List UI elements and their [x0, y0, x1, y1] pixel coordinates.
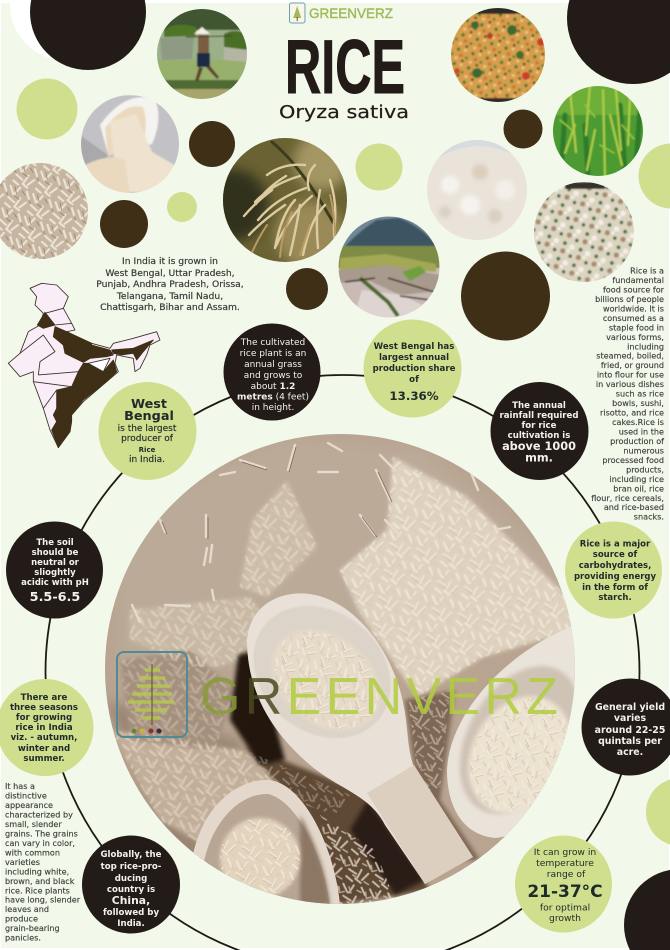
- callout: soil: acidic with pH: [21, 578, 89, 588]
- callout: temperature range: range of: [547, 869, 586, 880]
- text: description of rice uses: products,: [626, 464, 664, 474]
- callout: annual rainfall: [490, 382, 588, 480]
- callout: West Bengal largest producer: [98, 382, 196, 480]
- text: appearance description: brown, and black: [5, 876, 75, 886]
- callout: cultivated rice plant: in height.: [252, 403, 294, 413]
- callout: three seasons: three seasons: [10, 703, 78, 713]
- callout: West Bengal largest producer: Bengal: [124, 409, 174, 424]
- text: description of rice uses: Rice is a: [630, 266, 664, 276]
- callout: three seasons: [0, 679, 94, 776]
- text: description of rice uses: numerous: [623, 445, 664, 455]
- callout: general yield: around 22-25: [595, 725, 665, 736]
- text: description of rice uses: production of: [610, 436, 664, 446]
- callout: West Bengal largest producer: in India.: [129, 455, 165, 465]
- logo: Greenverz: [290, 3, 393, 23]
- callout: temperature range: [515, 836, 612, 932]
- text: appearance description: rice. Rice plants: [5, 885, 70, 895]
- photo: cooked white rice: [425, 140, 529, 246]
- scattered grains: [132, 443, 510, 622]
- text: appearance description: small, slender: [5, 819, 62, 829]
- photo: green rice plants: [550, 85, 646, 177]
- text: appearance description: can vary in color,: [5, 838, 75, 848]
- main photo: wooden spoons with rice: [100, 430, 605, 910]
- callout: source of carbohydrates: starch.: [598, 593, 632, 603]
- callout: general yield: acre.: [617, 747, 643, 758]
- callout: source of carbohydrates: Rice is a major: [580, 540, 651, 550]
- callout: cultivated rice plant: The cultivated: [240, 338, 305, 348]
- text: appearance description: varieties: [5, 857, 40, 867]
- text: description of rice uses: snacks.: [634, 512, 664, 522]
- callout: annual rainfall: rainfall required: [499, 411, 579, 421]
- callout: annual rainfall: The annual: [512, 401, 566, 411]
- callout: cultivated rice plant: [224, 324, 320, 420]
- text: description of rice uses: bran oil, rice: [613, 483, 664, 493]
- callout: soil: should be: [32, 548, 79, 558]
- text: description of rice uses: including: [627, 341, 664, 351]
- decorative circles: top-left white and dark: [10, 0, 146, 70]
- text: where rice is grown in India: Telangana, Tamil Nadu,: [116, 291, 223, 302]
- callout: cultivated rice plant: and grows to: [244, 371, 303, 381]
- small spoon lower left: [192, 780, 340, 905]
- callout: annual rainfall: mm.: [525, 452, 553, 464]
- photo: rice panicle: [223, 138, 347, 262]
- text: appearance description: distinctive: [5, 790, 47, 800]
- callout: general yield: [582, 678, 670, 776]
- callout: West Bengal largest producer: producer of: [121, 434, 174, 444]
- text: description of rice uses: consumed as a: [603, 313, 664, 323]
- text: description of rice uses: worldwide. It is: [603, 303, 664, 313]
- callout: cultivated rice plant: rice plant is an: [240, 349, 306, 359]
- text: description of rice uses: used in the: [619, 426, 664, 436]
- callout: top producing country: Globally, the: [100, 850, 162, 860]
- text: appearance description: produce: [5, 914, 38, 924]
- text: description of rice uses: in various dishes: [596, 379, 664, 389]
- decorative circle: top-right dark: [567, 0, 670, 84]
- dark shadows: [245, 745, 430, 905]
- text: appearance description: grain-bearing: [5, 923, 60, 933]
- callout: general yield: General yield: [595, 702, 665, 713]
- callout: cultivated rice plant: about 1.2: [251, 382, 295, 392]
- text: description of rice uses: risotto, and rice: [600, 408, 664, 418]
- text: description of rice uses: bowls, sushi,: [612, 398, 664, 408]
- text: appearance description: leaves and: [5, 904, 49, 914]
- text: appearance description: have long, slender: [5, 895, 81, 905]
- callout: annual production share: [364, 320, 462, 418]
- subtitle: Oryza sativa: [279, 102, 409, 123]
- text: description of rice uses: steamed, boiled,: [596, 351, 664, 361]
- text: appearance description: with common: [5, 847, 60, 857]
- callout: annual rainfall: cultivation is: [508, 431, 570, 441]
- callout: annual production share: 13.36%: [389, 389, 439, 403]
- callout: cultivated rice plant: metres (4 feet): [237, 392, 309, 402]
- connecting ring: [46, 375, 640, 950]
- photo: farmer carrying rice: [157, 9, 247, 99]
- callout: general yield: varies: [614, 713, 647, 724]
- photo: raw basmati rice: [0, 160, 90, 262]
- callout: top producing country: India.: [117, 919, 145, 929]
- callout: West Bengal largest producer: Rice: [139, 446, 156, 454]
- text: description of rice uses: billions of people: [595, 294, 664, 304]
- text: description of rice uses: processed food: [602, 455, 664, 465]
- text: where rice is grown in India: In India it is grown in: [122, 256, 218, 267]
- callout: source of carbohydrates: [565, 522, 662, 618]
- text: appearance description: grains. The grains: [5, 828, 78, 838]
- callout: source of carbohydrates: in the form of: [582, 583, 648, 593]
- text: where rice is grown in India: West Bengal, Uttar Pradesh,: [105, 268, 235, 279]
- callout: annual production share: of: [409, 375, 419, 385]
- text: description of rice uses: such as rice: [616, 389, 664, 399]
- callout: three seasons: viz. - autumn,: [11, 733, 77, 743]
- callout: source of carbohydrates: carbohydrates,: [579, 561, 651, 571]
- text: appearance description: characterized by: [5, 809, 73, 819]
- text: description of rice uses: into flour for use: [597, 370, 664, 380]
- watermark text: GREENVERZ: [200, 668, 558, 726]
- callout: three seasons: for growing: [16, 713, 72, 723]
- callout: source of carbohydrates: providing energy: [574, 572, 656, 582]
- callout: top producing country: followed by: [103, 908, 159, 918]
- callout: top producing country: China,: [112, 894, 150, 907]
- callout: soil: [6, 522, 103, 618]
- text: description of rice uses: including rice: [610, 474, 664, 484]
- main spoon: [247, 593, 473, 884]
- map: India rice-growing states: [8, 283, 160, 448]
- callout: source of carbohydrates: source of: [593, 550, 638, 560]
- callout: three seasons: winter and: [18, 744, 70, 754]
- callout: temperature range: growth: [549, 913, 581, 924]
- text: description of rice uses: various forms,: [606, 332, 664, 342]
- callout: annual production share: West Bengal has: [374, 342, 454, 352]
- callout: three seasons: rice in India: [15, 723, 73, 733]
- callout: soil: 5.5-6.5: [30, 590, 80, 605]
- callout: top producing country: country is: [107, 885, 155, 895]
- photo: fried rice: [450, 5, 546, 105]
- callout: temperature range: 21-37°C: [527, 882, 603, 902]
- text: description of rice uses: and rice-based: [604, 502, 664, 512]
- decorative circle: bottom-right dark: [624, 869, 670, 950]
- photo: rice with peas: [532, 180, 636, 284]
- callout: annual rainfall: above 1000: [502, 440, 576, 453]
- callout: West Bengal largest producer: West: [131, 397, 167, 412]
- text: description of rice uses: cakes.Rice is: [612, 417, 664, 427]
- photo: bowl of spilled rice: [80, 95, 180, 195]
- logo: Greenverz: GREENVERZ: [309, 6, 393, 21]
- text: description of rice uses: food source for: [603, 284, 665, 294]
- callout: soil: slioghtly: [34, 568, 76, 578]
- callout: soil: neutral or: [31, 558, 80, 568]
- right spoon: [447, 626, 575, 838]
- callout: general yield: quintals per: [598, 736, 662, 747]
- decorative green circles: [16, 78, 670, 846]
- callout: cultivated rice plant: annual grass: [244, 360, 302, 370]
- text: description of rice uses: flour, rice cereals,: [591, 493, 664, 503]
- callout: three seasons: summer.: [23, 754, 65, 764]
- photo: rice terraces: [338, 216, 440, 323]
- callout: temperature range: for optimal: [540, 902, 590, 914]
- text: where rice is grown in India: Chattisgarh, Bihar and Assam.: [100, 302, 240, 313]
- watermark logo icon: [117, 652, 187, 737]
- text: appearance description: It has a: [5, 781, 35, 791]
- text: description of rice uses: staple food in: [609, 322, 664, 332]
- text: description of rice uses: fundamental: [612, 275, 664, 285]
- text: appearance description: appearance: [5, 800, 53, 810]
- callout: annual production share: largest annual: [379, 353, 449, 363]
- callout: top producing country: top rice-pro-: [101, 862, 162, 872]
- text: appearance description: including white,: [5, 866, 69, 876]
- callout: West Bengal largest producer: is the largest: [118, 424, 177, 434]
- title: RICE: [285, 25, 405, 110]
- text: where rice is grown in India: Punjab, Andhra Pradesh, Orissa,: [96, 279, 244, 290]
- callout: annual rainfall: for rice: [522, 421, 557, 431]
- callout: temperature range: It can grow in: [534, 847, 596, 858]
- text: description of rice uses: fried, or ground: [601, 360, 664, 370]
- callout: annual production share: production share: [373, 364, 456, 374]
- callout: top producing country: [82, 836, 180, 934]
- rice piles: [110, 457, 575, 860]
- callout: temperature range: temperature: [536, 858, 594, 869]
- callout: top producing country: ducing: [115, 874, 147, 884]
- callout: soil: The soil: [36, 538, 74, 548]
- callout: three seasons: There are: [21, 693, 68, 703]
- text: appearance description: panicles.: [5, 933, 41, 943]
- decorative brown circles: [100, 110, 550, 340]
